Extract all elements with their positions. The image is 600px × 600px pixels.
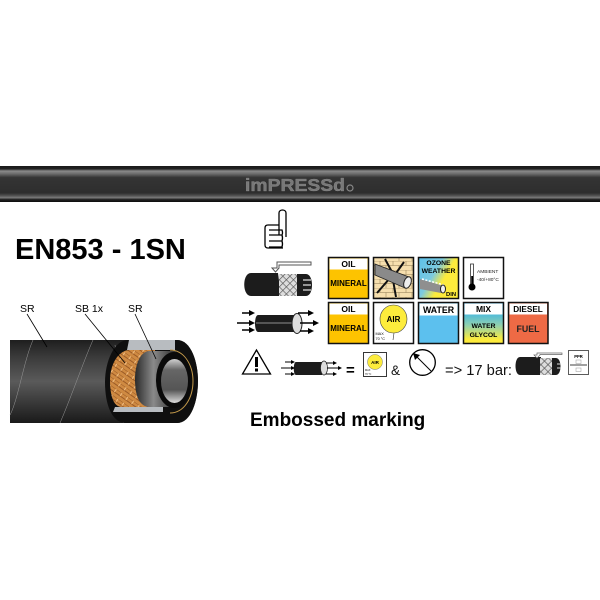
badge: ozone weather din: DIN: [446, 292, 456, 298]
equals sign: =: [346, 362, 355, 379]
pressure text: => 17 bar:: [445, 363, 512, 379]
hose band with imPRESSd logo: [0, 166, 600, 202]
grey top and bottom cut faces: [127, 340, 175, 350]
badge: small air: [364, 352, 386, 376]
ampersand: &: [391, 363, 400, 378]
badge: mix water glycol: WATER: [471, 323, 496, 330]
title: EN853 - 1SN: [15, 234, 186, 266]
icon: warning triangle: [242, 350, 270, 374]
label: SR right: [128, 303, 156, 359]
badge: ozone weather din: OZONE: [426, 260, 451, 267]
badge: ambient temperature: -40/+80°C: [477, 277, 499, 283]
icon: hose with arrow: [244, 262, 312, 296]
badge: small air: AIR: [371, 360, 380, 365]
icon: PPR box: [568, 350, 588, 374]
steel braid: [110, 350, 155, 407]
badge: oil mineral: OIL: [341, 259, 356, 269]
badge: air: AIR: [387, 315, 401, 324]
inner tube: [135, 351, 176, 407]
badge: mix water glycol: [464, 302, 504, 344]
badge: ambient temperature: [464, 258, 504, 298]
badge: oil mineral: MINERAL: [330, 279, 367, 288]
badge: small air: MAX: [365, 369, 371, 372]
label: SR right: SR: [128, 303, 143, 315]
badge: air: 70 °C: [376, 337, 385, 341]
badge: small air: 70 °C: [365, 373, 371, 376]
icon: hose with arrow, small: [516, 353, 562, 375]
badge: mix water glycol: GLYCOL: [470, 332, 497, 339]
icon: hose with flow arrows: [237, 310, 319, 334]
label: SB 1x: [75, 303, 125, 363]
label: SR left: [20, 303, 47, 347]
icon: PPR box: PPR: [574, 354, 583, 359]
icon: bend radius circle: [410, 350, 435, 375]
badge: mix water glycol: MIX: [476, 304, 491, 314]
gold ring on end face: [170, 350, 193, 413]
badge: oil mineral: [328, 258, 368, 298]
embossed marking caption: Embossed marking: [250, 410, 425, 431]
badge: air: [374, 302, 414, 344]
badge: air: MAX: [376, 332, 384, 336]
badge: diesel fuel: [508, 302, 548, 344]
badge: hose on roof tiles: [374, 258, 414, 298]
badge: oil mineral second row: MINERAL: [330, 324, 367, 333]
outer cover: [10, 340, 198, 423]
badge: ozone weather din: [418, 258, 458, 298]
badge: water: WATER: [423, 305, 455, 315]
hose cutaway illustration: [10, 340, 198, 423]
bore: [161, 359, 188, 403]
end face: [156, 352, 192, 408]
badge: oil mineral second row: OIL: [341, 304, 356, 314]
badge: oil mineral second row: [328, 302, 368, 344]
badge: water: [418, 302, 458, 344]
badge: ozone weather din: WEATHER: [422, 268, 456, 275]
label: SR left: SR: [20, 303, 35, 315]
label: SB 1x: SB 1x: [75, 303, 104, 315]
icon: thumbs-up hand: [265, 210, 286, 248]
badge: diesel fuel: DIESEL: [513, 305, 543, 314]
badge: ambient temperature: AMBIENT: [477, 269, 498, 275]
badge: diesel fuel: FUEL: [517, 324, 540, 334]
logo: imPRESSd: imPRESSd: [245, 175, 345, 195]
icon: small hose with flow arrows: [281, 360, 342, 376]
cut edge of cover: [105, 340, 198, 423]
